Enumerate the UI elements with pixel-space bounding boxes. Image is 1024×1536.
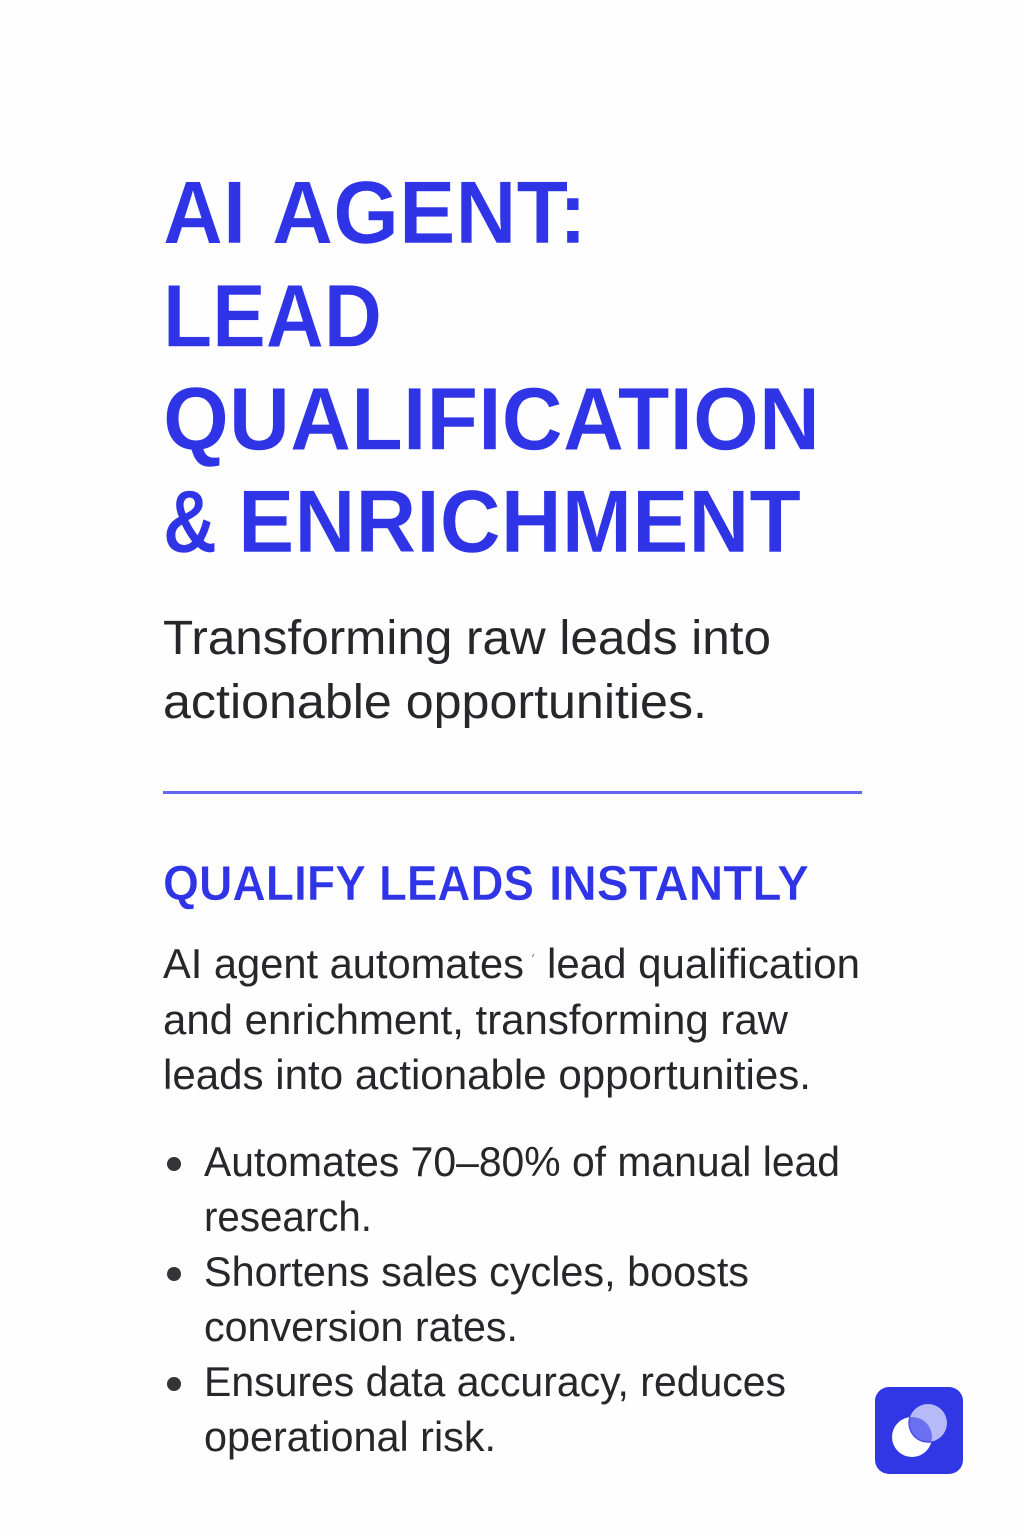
bullet 3: Ensures data accuracy, reduces xyxy=(204,1358,786,1405)
title xyxy=(163,162,820,571)
title: & xyxy=(163,471,217,571)
bullet 1 xyxy=(167,1138,840,1240)
bullet 2 xyxy=(167,1248,749,1350)
section heading: INSTANTLY xyxy=(549,857,809,911)
title: LEAD xyxy=(163,266,382,366)
title: AI xyxy=(163,162,246,262)
bullet 2: Shortens sales cycles, boosts xyxy=(204,1248,749,1295)
body paragraph: AI agent automates xyxy=(163,940,524,987)
title: QUALIFICATION xyxy=(163,368,820,468)
icon: overlapping circles badge xyxy=(875,1387,963,1474)
body paragraph: and enrichment, transforming raw xyxy=(163,996,789,1043)
body paragraph: lead qualification xyxy=(547,940,860,987)
bullet 3 xyxy=(167,1358,786,1460)
bullet 3: operational risk. xyxy=(204,1413,496,1460)
subtitle xyxy=(163,612,771,729)
bullet 1: research. xyxy=(204,1193,372,1240)
title: AGENT: xyxy=(272,162,587,262)
section heading: QUALIFY xyxy=(163,857,366,911)
divider xyxy=(163,791,862,794)
bullet 2: conversion rates. xyxy=(204,1303,518,1350)
section heading xyxy=(163,857,809,911)
section heading: LEADS xyxy=(379,857,534,911)
bullet list xyxy=(167,1138,840,1460)
title: ENRICHMENT xyxy=(238,471,801,571)
body paragraph xyxy=(163,940,860,1098)
subtitle: Transforming raw leads into xyxy=(163,612,771,665)
bullet 1: Automates 70–80% of manual lead xyxy=(204,1138,840,1185)
body paragraph: leads into actionable opportunities. xyxy=(163,1051,811,1098)
subtitle: actionable opportunities. xyxy=(163,676,707,729)
